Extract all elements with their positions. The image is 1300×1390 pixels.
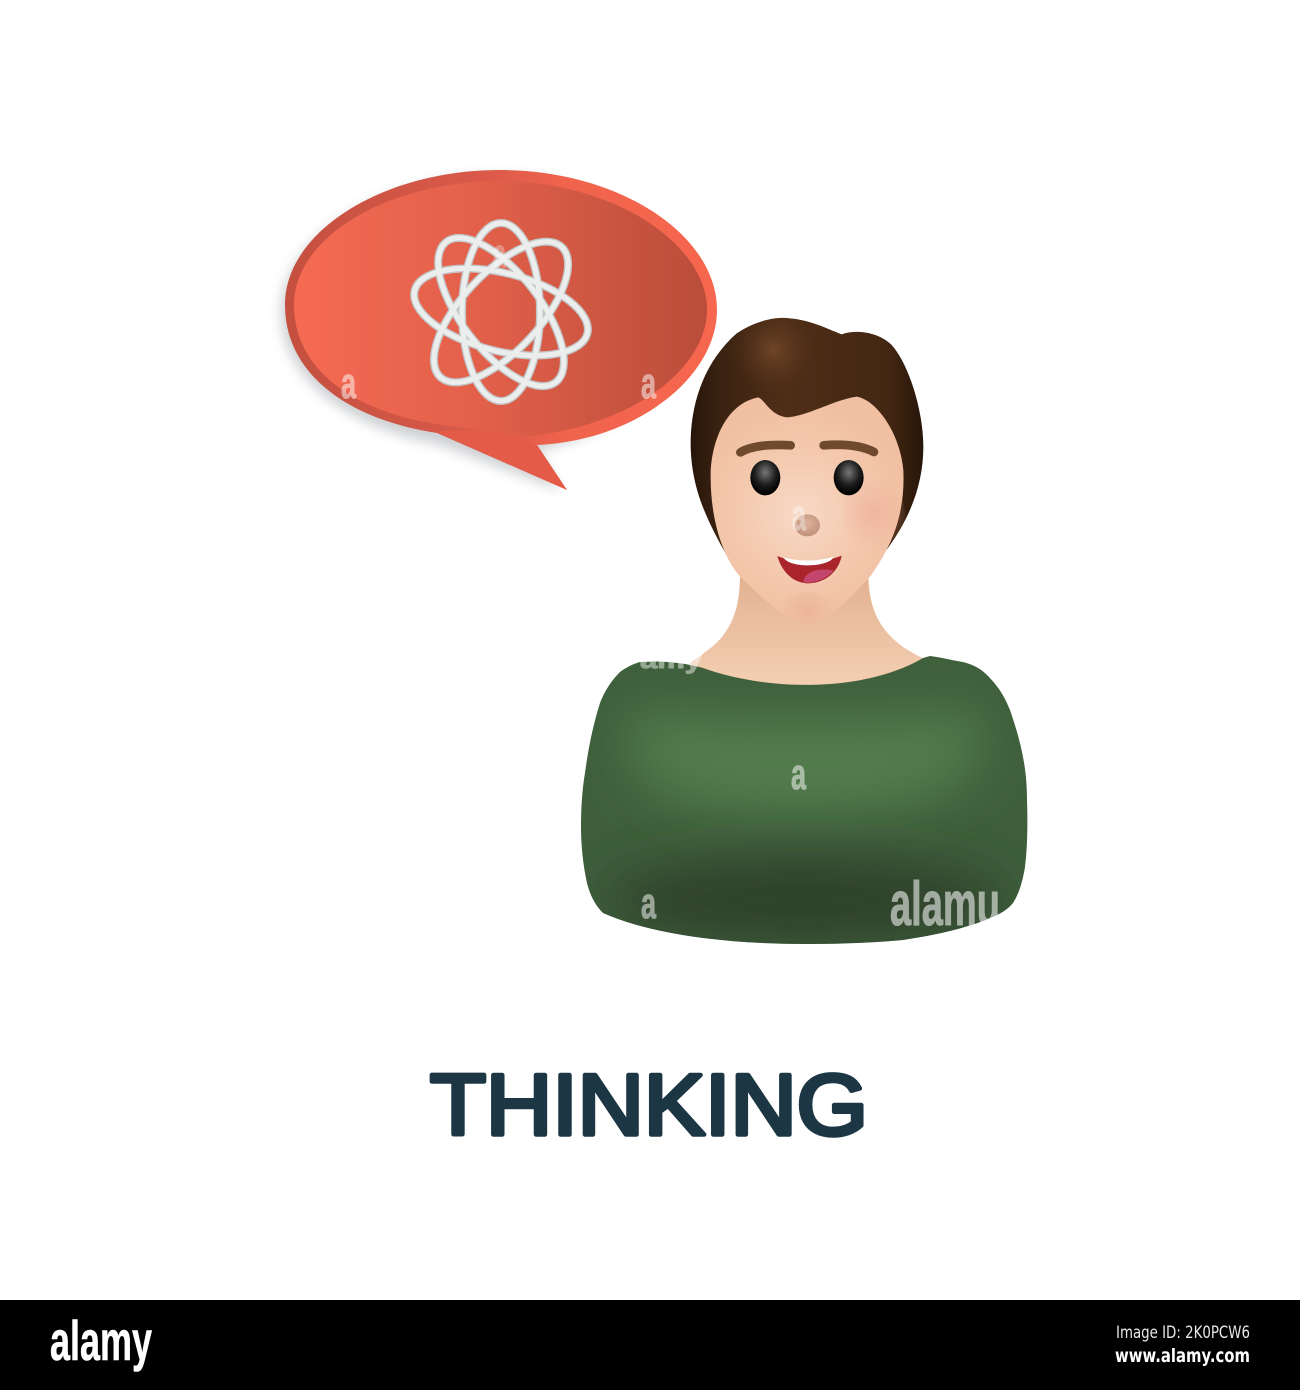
watermarks: a <box>641 879 656 928</box>
nose <box>795 514 820 536</box>
head and neck <box>690 318 930 690</box>
watermarks: a <box>791 750 806 799</box>
hair <box>691 318 923 558</box>
alamy logo: alamy <box>50 1309 152 1372</box>
website: www.alamy.com <box>1115 1345 1250 1367</box>
mouth <box>777 556 842 583</box>
bubble tail <box>437 430 567 490</box>
title: THINKING <box>430 1058 868 1154</box>
watermarks: a <box>341 359 356 408</box>
bubble outer rim <box>285 170 717 490</box>
speech bubble <box>281 170 717 490</box>
bubble shadow <box>281 176 680 490</box>
watermarks: a <box>493 232 506 276</box>
bubble inner face <box>294 181 707 437</box>
image id: Image ID: 2K0PCW6 <box>1116 1323 1250 1343</box>
eyes <box>750 460 864 495</box>
green sweater <box>570 650 1040 950</box>
face <box>711 397 905 625</box>
watermarks <box>341 232 1000 939</box>
neck <box>690 573 930 690</box>
watermarks: a <box>792 491 806 540</box>
person <box>570 318 1040 950</box>
eyebrows <box>740 445 874 452</box>
icon: atom <box>405 218 597 406</box>
watermarks: amy <box>640 644 703 674</box>
watermarks: a <box>641 359 656 408</box>
footer bar <box>0 1300 1300 1390</box>
watermarks: alamu <box>890 870 1000 939</box>
